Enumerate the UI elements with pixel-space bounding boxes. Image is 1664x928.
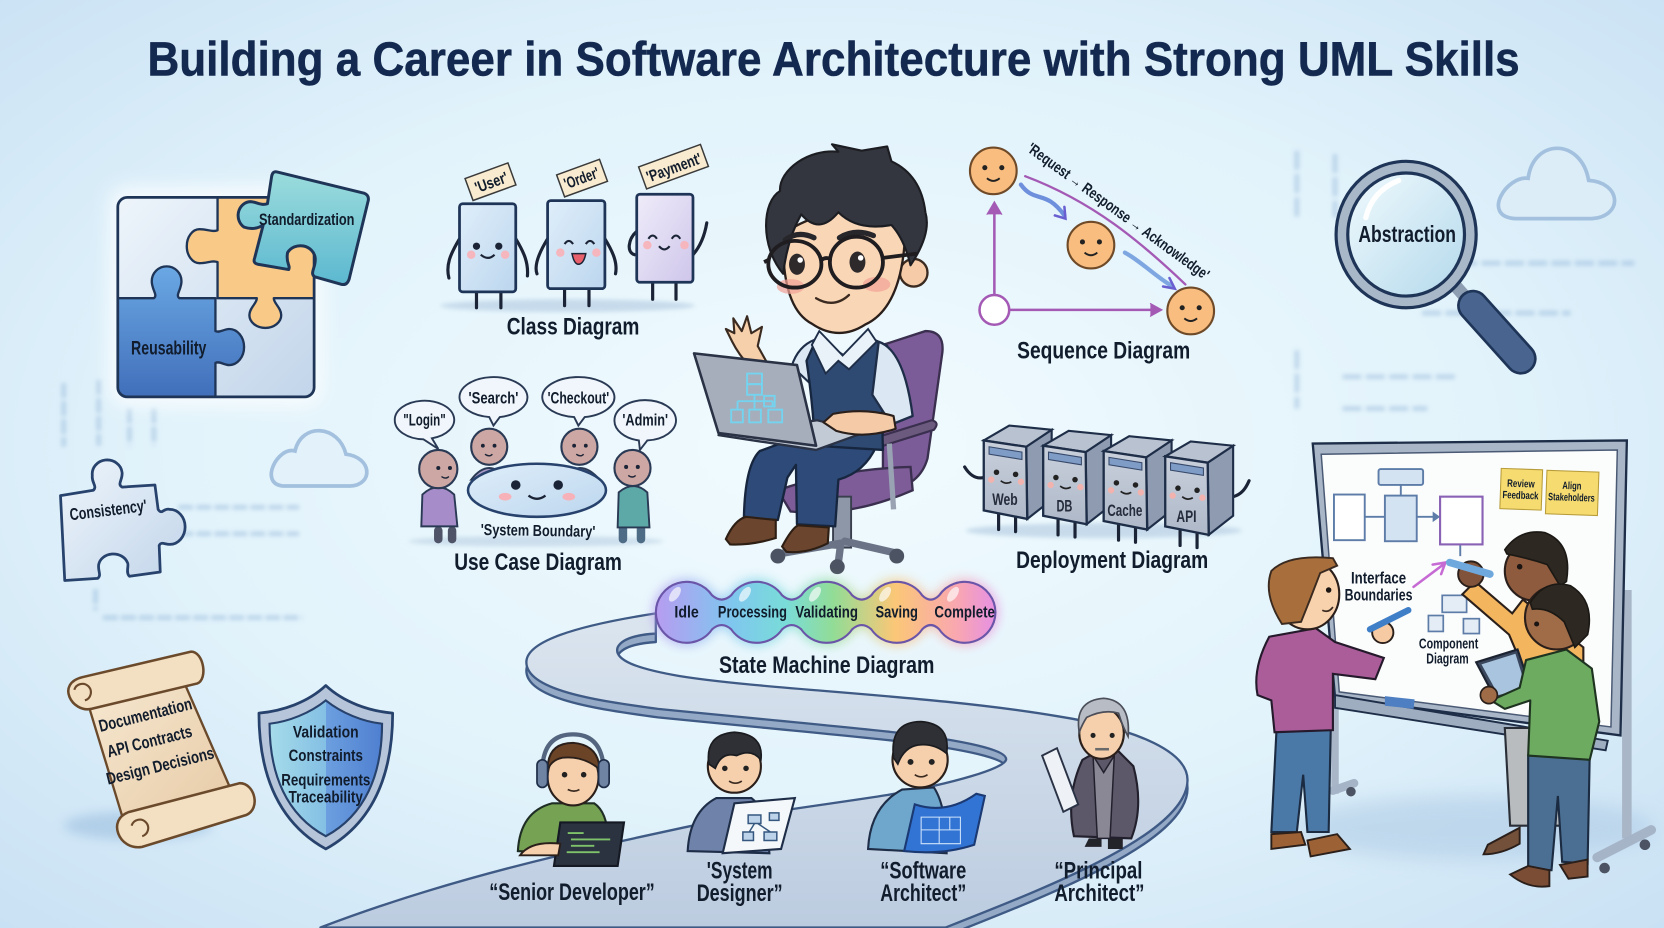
- label: State Machine Diagram: State Machine Diagram: [719, 652, 934, 679]
- shirt and vest: [792, 329, 913, 450]
- label: Deployment Diagram: Deployment Diagram: [1016, 547, 1208, 574]
- person: front with tablet: [1476, 584, 1599, 887]
- career step: Senior Developer: [489, 734, 655, 906]
- person: left with marker: [1256, 557, 1408, 856]
- speech bubble: Login: "Login": [403, 412, 446, 430]
- server: DB: DB: [1056, 498, 1072, 516]
- puzzle: assembled pieces: [109, 187, 322, 405]
- speech bubble: Search: [459, 377, 527, 426]
- server arms: [965, 467, 1249, 497]
- label: Software Architect: [880, 858, 966, 907]
- label: Principal Architect: “Principal: [1054, 858, 1142, 885]
- speech bubble: Admin: 'Admin': [622, 412, 668, 430]
- label: System Designer: 'System: [707, 858, 773, 885]
- whiteboard class sketch: [1334, 469, 1483, 556]
- label: Principal Architect: [1054, 858, 1145, 907]
- label: Principal Architect: Architect”: [1054, 880, 1145, 907]
- arrow: to interface: [1414, 562, 1445, 587]
- label: System Boundary: 'System Boundary': [481, 522, 595, 541]
- cloud outline: left: [271, 431, 367, 486]
- scroll text: [97, 694, 216, 789]
- hair: [766, 144, 927, 274]
- road: career path: [320, 613, 1188, 928]
- class diagram: [440, 144, 708, 340]
- label: Interface Boundaries: [1345, 570, 1412, 605]
- puzzle piece: Consistency: [60, 460, 185, 580]
- message label: 'Request → Response → Acknowledge': [1024, 140, 1212, 284]
- career step: Software Architect: [868, 722, 985, 907]
- puzzle piece: Reusability: [111, 266, 244, 403]
- scroll top roll: [68, 652, 203, 709]
- typing forearm and hand: [824, 411, 896, 435]
- principal scroll: [1042, 748, 1078, 812]
- speech bubble: Search: 'Search': [469, 389, 518, 407]
- class character: Payment: [629, 144, 708, 299]
- label: Interface Boundaries: Boundaries: [1345, 587, 1412, 605]
- collaboration scene: whiteboard team: [1256, 440, 1656, 887]
- scroll text: API Contracts: [105, 722, 194, 761]
- developer laptop: [554, 822, 624, 866]
- label: Class Diagram: Class Diagram: [507, 313, 639, 340]
- actor: back right: [561, 429, 600, 480]
- label: Component Diagram: [1419, 636, 1478, 667]
- shield text: Constraints: [289, 746, 363, 765]
- label: Use Case Diagram: Use Case Diagram: [454, 549, 622, 576]
- state blobs: [656, 582, 995, 643]
- actor: left: [419, 450, 457, 539]
- architect blueprint: [904, 794, 985, 852]
- server: Cache: Cache: [1107, 502, 1142, 520]
- state labels: Saving: [876, 603, 918, 622]
- participant: middle: [1068, 222, 1114, 268]
- label: Reusability: Reusability: [131, 338, 207, 359]
- label: Senior Developer: “Senior Developer”: [489, 879, 655, 906]
- sticky note: Review Feedback: Feedback: [1502, 489, 1539, 502]
- tablet: [1476, 649, 1531, 700]
- class character: Order: [536, 159, 616, 306]
- lifeline start node: [980, 295, 1009, 325]
- actor: right: [614, 450, 651, 539]
- faded background sketches: right: [1297, 151, 1634, 409]
- message arrows: [987, 176, 1185, 316]
- head: [764, 144, 928, 333]
- class character: User: 'User': [473, 169, 510, 197]
- label: Standardization: Standardization: [259, 211, 354, 229]
- speech bubble: Admin: [614, 400, 676, 450]
- scroll text: Documentation: [97, 694, 194, 736]
- server: Web: [984, 426, 1052, 532]
- speech bubble: Checkout: 'Checkout': [548, 389, 609, 407]
- puzzle piece: orange: [187, 197, 318, 328]
- class character: User: [448, 163, 528, 308]
- shield text: Requirements: [281, 770, 370, 789]
- cheeks: [777, 279, 804, 294]
- label: Interface Boundaries: Interface: [1351, 570, 1406, 588]
- shield: validation: [259, 686, 393, 849]
- title: Building a Career in Software Architecture with Strong UML Skills: [148, 33, 1520, 86]
- career step: System Designer: [688, 732, 795, 907]
- sticky note: Align Stakeholders: Align: [1562, 480, 1582, 493]
- deployment diagram: [965, 426, 1249, 574]
- scroll bottom roll: [117, 783, 255, 847]
- label: Software Architect: “Software: [880, 858, 966, 885]
- actor: back left: [471, 429, 507, 480]
- legs: [726, 430, 877, 552]
- whiteboard: [1313, 440, 1627, 750]
- state glow: [656, 582, 995, 643]
- label: Software Architect: Architect”: [880, 880, 966, 907]
- label: System Designer: Designer”: [697, 880, 783, 907]
- server: API: [1165, 441, 1233, 548]
- magnifying glass: Abstraction: [1336, 161, 1521, 359]
- chair: [770, 331, 943, 574]
- central character: architect with laptop on chair: [694, 144, 943, 574]
- sequence diagram: [970, 140, 1214, 365]
- glasses: [764, 237, 917, 288]
- server: DB: [1043, 431, 1111, 537]
- participant: top: [970, 148, 1017, 194]
- label: Consistency: Consistency': [69, 496, 148, 524]
- speech bubble: Checkout: [542, 377, 614, 426]
- class character: Order: 'Order': [562, 165, 602, 193]
- cloud outline: right: [1498, 148, 1615, 219]
- state labels: Idle: [674, 603, 699, 622]
- laptop: [694, 353, 866, 450]
- puzzle piece: Standardization: [238, 172, 368, 285]
- label: Component Diagram: Component: [1419, 636, 1478, 652]
- speech bubble: Login: [395, 401, 454, 449]
- eyes: [789, 254, 805, 275]
- component sketch: [1428, 595, 1479, 634]
- sticky note: Align Stakeholders: [1545, 470, 1599, 516]
- faded background sketches: left: [64, 380, 302, 618]
- label: Component Diagram: Diagram: [1426, 651, 1469, 667]
- system boundary ellipse: [468, 464, 606, 517]
- label: Abstraction: Abstraction: [1358, 221, 1456, 247]
- road surface: [320, 613, 1188, 928]
- laptop screen diagram: [731, 374, 782, 422]
- state labels: Complete: [934, 603, 995, 622]
- road edge thickness: [320, 622, 1188, 928]
- state machine diagram: [656, 582, 995, 679]
- use case diagram: [395, 377, 676, 576]
- participant: bottom: [1167, 288, 1214, 334]
- designer diagram sheet: [723, 798, 795, 853]
- state highlights: [667, 585, 961, 604]
- class character: Payment: 'Payment': [644, 151, 704, 186]
- shield text: [281, 723, 370, 806]
- whiteboard stand: [1333, 590, 1651, 873]
- waving hand: [726, 316, 768, 367]
- scroll: documentation: [64, 652, 255, 847]
- label: System Designer: [697, 858, 783, 907]
- eyebrows: [785, 232, 873, 240]
- sticky note: Review Feedback: [1500, 468, 1543, 510]
- label: Sequence Diagram: Sequence Diagram: [1017, 338, 1190, 365]
- person: right back with marker: [1450, 532, 1583, 854]
- state labels: Processing: [718, 603, 787, 622]
- server: Web: Web: [992, 491, 1018, 509]
- sticky note: Align Stakeholders: Stakeholders: [1548, 491, 1595, 505]
- sticky note: Review Feedback: Review: [1507, 478, 1535, 491]
- state labels: Validating: [795, 603, 858, 622]
- server: Cache: [1104, 436, 1172, 542]
- scroll text: Design Decisions: [104, 743, 216, 789]
- shield text: Validation: [293, 723, 359, 742]
- state labels: [674, 603, 995, 622]
- shield text: Traceability: [289, 787, 363, 806]
- server: API: API: [1176, 508, 1197, 526]
- career step: Principal Architect: [1042, 698, 1145, 907]
